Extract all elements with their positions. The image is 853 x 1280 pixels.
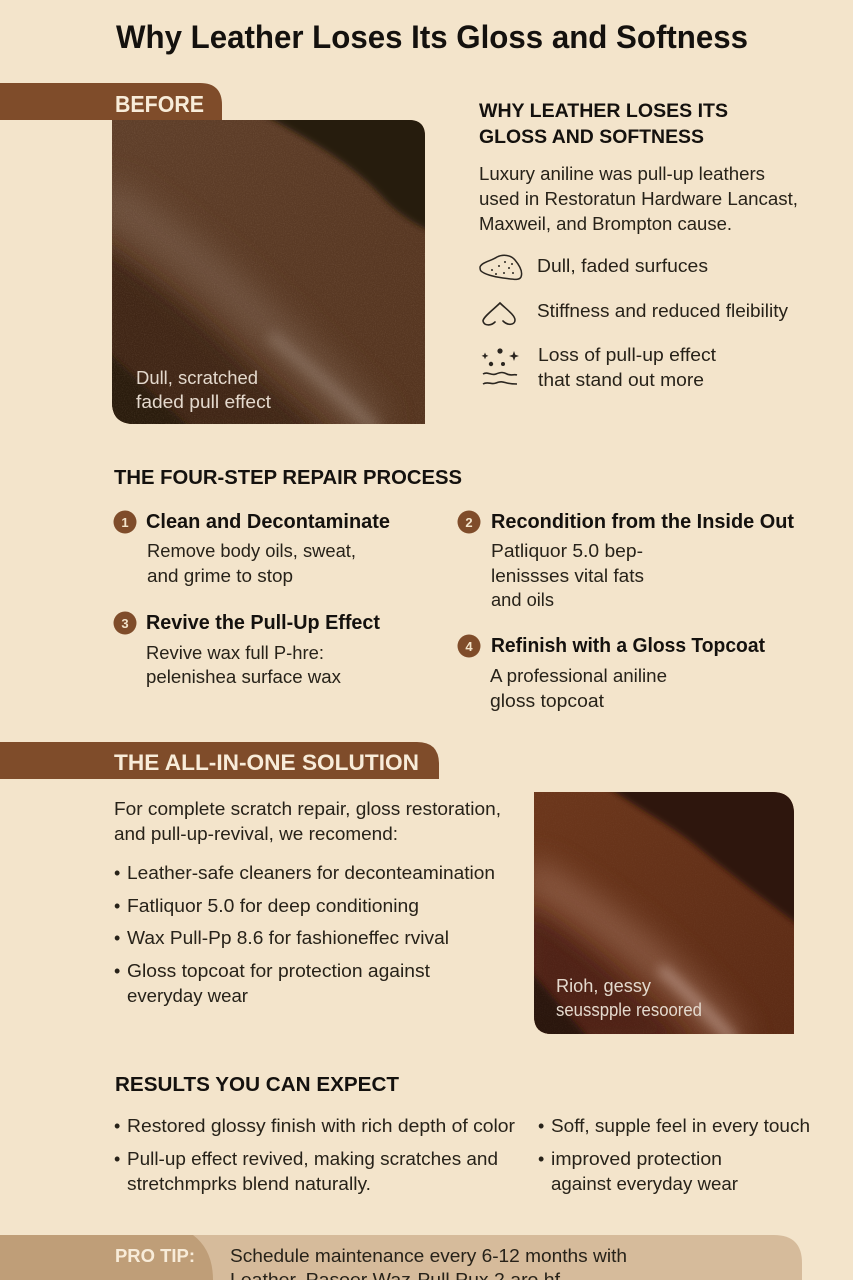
panel: results	[114, 1074, 810, 1194]
heading: RESULTS YOU CAN EXPECT	[115, 1074, 399, 1096]
text: loss of pull-up: Loss of pull-up effect	[538, 345, 716, 365]
results left column: •	[114, 1149, 120, 1169]
text: dull surfaces: Dull, faded surfuces	[537, 256, 708, 276]
panel: before	[0, 83, 440, 440]
caption: faded pull effect	[136, 392, 271, 412]
banner: before	[0, 83, 222, 120]
banner: all-in-one solution	[0, 742, 439, 779]
results left column	[114, 1116, 515, 1194]
bullet list: •	[114, 896, 120, 916]
bullet list: Wax Pull-Pp 8.6 for fashioneffec rvival	[127, 928, 449, 948]
step 4	[458, 634, 765, 711]
step 2: Recondition from the Inside Out	[491, 511, 794, 533]
pro tip label: PRO TIP:	[115, 1246, 195, 1266]
bullet list: everyday wear	[127, 986, 248, 1006]
panel: why leather loses gloss	[479, 101, 798, 390]
text: loss of pull-up	[538, 345, 716, 390]
intro text: For complete scratch repair, gloss restoration,	[114, 799, 501, 819]
results left column: •	[114, 1116, 120, 1136]
title: Why Leather Loses Its Gloss and Softness	[116, 19, 748, 55]
step 2: Patliquor 5.0 bep-	[491, 541, 643, 561]
results right column: improved protection	[551, 1149, 722, 1169]
pro tip text	[230, 1246, 627, 1280]
intro text: and pull-up-revival, we recomend:	[114, 824, 398, 844]
step 3: pelenishea surface wax	[146, 667, 341, 687]
step 2: lenissses vital fats	[491, 566, 644, 586]
caption: Dull, scratched	[136, 368, 258, 388]
bullet list	[114, 863, 495, 1006]
step 2	[458, 510, 794, 610]
heading: GLOSS AND SOFTNESS	[479, 127, 704, 148]
intro text	[479, 164, 798, 234]
heading: WHY LEATHER LOSES ITS	[479, 101, 728, 122]
pro tip label	[0, 1235, 213, 1280]
results right column: •	[538, 1149, 544, 1169]
results right column: •	[538, 1116, 544, 1136]
results left column: Restored glossy finish with rich depth of color	[127, 1116, 515, 1136]
icon: dull surface	[480, 255, 522, 279]
step 4: 4	[465, 639, 473, 654]
results right column: against everyday wear	[551, 1174, 738, 1194]
caption	[136, 368, 271, 412]
step 4: A professional aniline	[490, 666, 667, 686]
panel: pro tip	[0, 1235, 802, 1280]
step 2: 2	[465, 515, 473, 530]
text: stiffness: Stiffness and reduced fleibility	[537, 301, 788, 321]
step 4: gloss topcoat	[490, 691, 604, 711]
image: dull leather	[112, 120, 425, 424]
banner: all-in-one solution: THE ALL-IN-ONE SOLUTION	[114, 750, 419, 775]
icon: stiffness	[483, 303, 515, 325]
bullet list: Leather-safe cleaners for deconteamination	[127, 863, 495, 883]
step 3: 3	[121, 616, 129, 631]
bullet list: Gloss topcoat for protection against	[127, 961, 430, 981]
step 1: Clean and Decontaminate	[146, 511, 390, 533]
caption: Rioh, gessy	[556, 976, 651, 996]
results left column: Pull-up effect revived, making scratches and	[127, 1149, 498, 1169]
step 1	[114, 510, 390, 586]
step 1: 1	[121, 515, 129, 530]
bullet list: •	[114, 928, 120, 948]
intro text	[114, 799, 501, 844]
step 1: and grime to stop	[147, 566, 293, 586]
icon: loss of pull-up	[482, 348, 519, 384]
banner: before: BEFORE	[115, 91, 204, 117]
step 1: Remove body oils, sweat,	[147, 541, 356, 561]
intro text: used in Restoratun Hardware Lancast,	[479, 189, 798, 209]
panel: four-step process	[114, 467, 794, 711]
intro text: Maxweil, and Brompton cause.	[479, 214, 732, 234]
bullet list: Fatliquor 5.0 for deep conditioning	[127, 896, 419, 916]
step 4: Refinish with a Gloss Topcoat	[491, 635, 765, 657]
step 2: and oils	[491, 590, 554, 610]
results right column	[538, 1116, 810, 1194]
caption	[556, 976, 702, 1020]
intro text: Luxury aniline was pull-up leathers	[479, 164, 765, 184]
step 3: Revive the Pull-Up Effect	[146, 612, 380, 634]
panel: all-in-one solution	[0, 742, 805, 1045]
results left column: stretchmprks blend naturally.	[127, 1174, 371, 1194]
results right column: Soff, supple feel in every touch	[551, 1116, 810, 1136]
heading	[479, 101, 728, 148]
heading: THE FOUR-STEP REPAIR PROCESS	[114, 467, 462, 489]
caption: seusspple resoored	[556, 1000, 702, 1020]
text: loss of pull-up: that stand out more	[538, 370, 704, 390]
step 3	[114, 612, 380, 687]
pro tip text: Schedule maintenance every 6-12 months with	[230, 1246, 627, 1266]
step 3: Revive wax full P-hre:	[146, 643, 324, 663]
bullet list: •	[114, 863, 120, 883]
bullet list: •	[114, 961, 120, 981]
image: restored leather	[534, 792, 794, 1034]
